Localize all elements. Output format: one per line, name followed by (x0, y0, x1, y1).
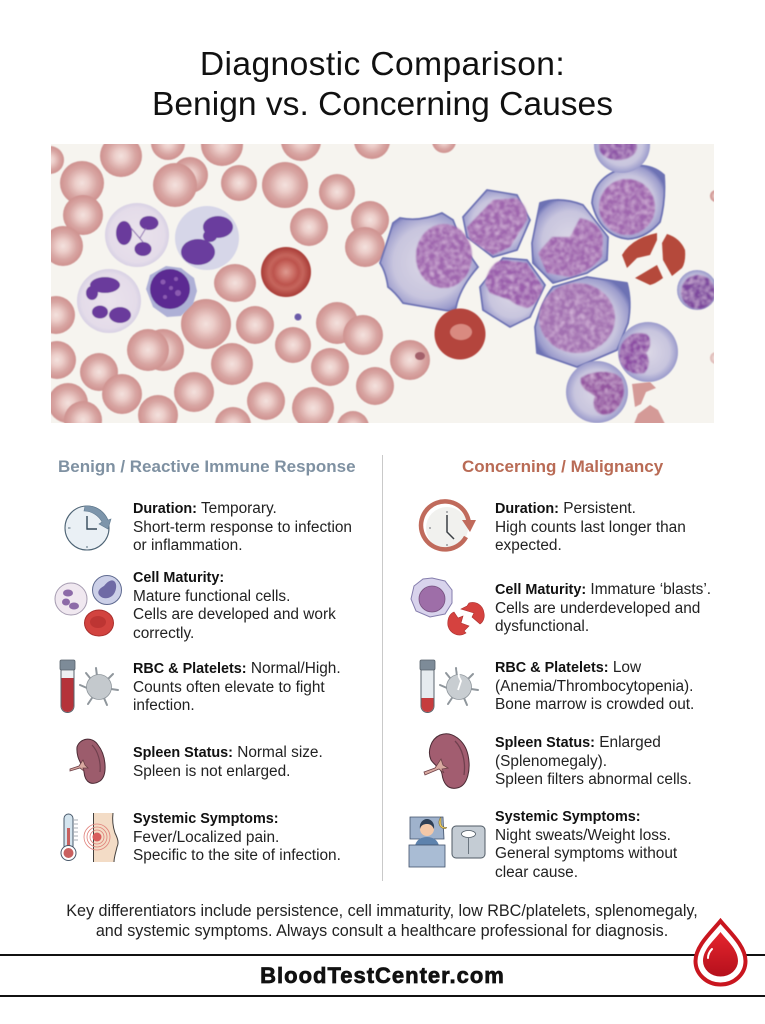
icon: weight scale (452, 826, 486, 858)
text: rbc platelets normal (133, 660, 341, 714)
text: spleen enlarged: Spleen Status: Enlarged (495, 734, 661, 751)
text: systemic symptoms general (495, 809, 678, 881)
text: systemic symptoms general: Systemic Symptoms: (495, 809, 641, 825)
blast cells (380, 117, 717, 423)
text: spleen normal: Spleen is not enlarged. (133, 763, 290, 780)
text: rbc platelets low: RBC & Platelets: Low (495, 659, 641, 676)
heading: benign column: Benign / Reactive Immune Response (58, 457, 356, 476)
text: cell maturity immature: dysfunctional. (495, 618, 589, 635)
footer note (66, 902, 698, 940)
text: rbc platelets low (495, 659, 694, 713)
icon: mature cells (54, 575, 122, 636)
icon: damaged platelet (439, 667, 479, 706)
divider (382, 455, 383, 881)
text: systemic symptoms general: clear cause. (495, 864, 578, 881)
text: spleen normal (133, 744, 323, 780)
panel: concerning RBC and platelets (420, 659, 694, 713)
panel: benign RBC and platelets (60, 660, 341, 714)
panel: concerning duration (418, 499, 686, 554)
panel: concerning systemic symptoms (408, 809, 678, 881)
panel: benign cell maturity (54, 570, 336, 642)
heading: concerning column: Concerning / Malignancy (462, 457, 663, 476)
text: rbc platelets normal: infection. (133, 697, 195, 714)
panel: concerning spleen (424, 733, 692, 789)
text: cell maturity immature (495, 581, 711, 635)
text: cell maturity immature: Cells are underdeveloped and (495, 600, 700, 617)
neutrophils (77, 203, 239, 333)
title (152, 46, 613, 123)
spot on damaged pale red cell (415, 352, 425, 360)
text: spleen enlarged (495, 734, 692, 788)
panel: benign duration (64, 500, 352, 554)
red blood cells (36, 121, 722, 443)
title: Benign vs. Concerning Causes (152, 86, 613, 123)
text: systemic symptoms localized: Systemic Symptoms: (133, 811, 279, 827)
text: duration temporary: Duration: Temporary. (133, 500, 277, 517)
footer note: and systemic symptoms. Always consult a healthcare professional for diagnosis. (96, 922, 668, 940)
text: duration temporary (133, 500, 352, 554)
icon: blood drop logo (694, 918, 748, 986)
text: systemic symptoms localized: Specific to the site of infection. (133, 847, 341, 864)
fragmented red cell (622, 233, 685, 285)
footer band with site name: BloodTestCenter.com (260, 963, 505, 988)
text: rbc platelets normal: Counts often elevate to fight (133, 679, 325, 696)
text: spleen enlarged: Spleen filters abnormal cells. (495, 771, 692, 788)
icon: full blood tube (60, 660, 76, 713)
text: systemic symptoms localized (133, 811, 341, 864)
text: duration temporary: Short-term response to infection (133, 519, 352, 536)
icon: spleen normal (70, 738, 106, 784)
text: cell maturity mature: Mature functional cells. (133, 588, 290, 605)
icon: localized pain on skin (84, 813, 118, 862)
icon: blast and ruptured cell (410, 578, 485, 636)
dark red cell (434, 308, 486, 360)
text: cell maturity immature: Cell Maturity: Immature ‘blasts’. (495, 581, 711, 598)
panel: benign spleen (70, 738, 323, 784)
text: cell maturity mature: correctly. (133, 625, 194, 642)
text: systemic symptoms localized: Fever/Localized pain. (133, 829, 279, 846)
title: Diagnostic Comparison: (200, 46, 565, 83)
icon: low blood tube (420, 660, 436, 713)
icon: clock with circular arrow (418, 499, 476, 552)
footer note: Key differentiators include persistence, cell immaturity, low RBC/platelets, splenomegaly, (66, 902, 698, 920)
text: rbc platelets low: (Anemia/Thrombocytopenia). (495, 678, 693, 695)
fragmented pale red cell (632, 382, 666, 426)
text: cell maturity mature: Cells are developed and work (133, 606, 336, 623)
panel: concerning cell maturity (410, 578, 711, 636)
text: rbc platelets low: Bone marrow is crowded out. (495, 696, 694, 713)
platelet (294, 314, 302, 320)
lymphocyte (146, 266, 197, 317)
icon: person in bed with moon (408, 816, 448, 868)
text: cell maturity mature: Cell Maturity: (133, 570, 224, 586)
text: duration persistent: expected. (495, 537, 562, 554)
panel: benign systemic symptoms (60, 811, 341, 864)
micrograph: blood smear comparing normal and malignant cells (51, 144, 714, 423)
text: duration persistent (495, 500, 686, 554)
icon: clock with short arrow (64, 506, 112, 550)
text: duration temporary: or inflammation. (133, 537, 242, 554)
text: systemic symptoms general: Night sweats/Weight loss. (495, 827, 671, 844)
text: duration persistent: High counts last longer than (495, 519, 686, 536)
footer band with site name (0, 954, 765, 997)
icon: thermometer (60, 814, 78, 861)
text: spleen enlarged: (Splenomegaly). (495, 753, 607, 770)
text: duration persistent: Duration: Persistent. (495, 500, 636, 517)
target red cell (261, 247, 311, 297)
text: rbc platelets normal: RBC & Platelets: Normal/High. (133, 660, 341, 677)
icon: enlarged spleen (424, 733, 470, 789)
text: systemic symptoms general: General symptoms without (495, 845, 677, 862)
text: spleen normal: Spleen Status: Normal size. (133, 744, 323, 761)
icon: platelet (79, 667, 119, 706)
text: cell maturity mature (133, 570, 336, 642)
